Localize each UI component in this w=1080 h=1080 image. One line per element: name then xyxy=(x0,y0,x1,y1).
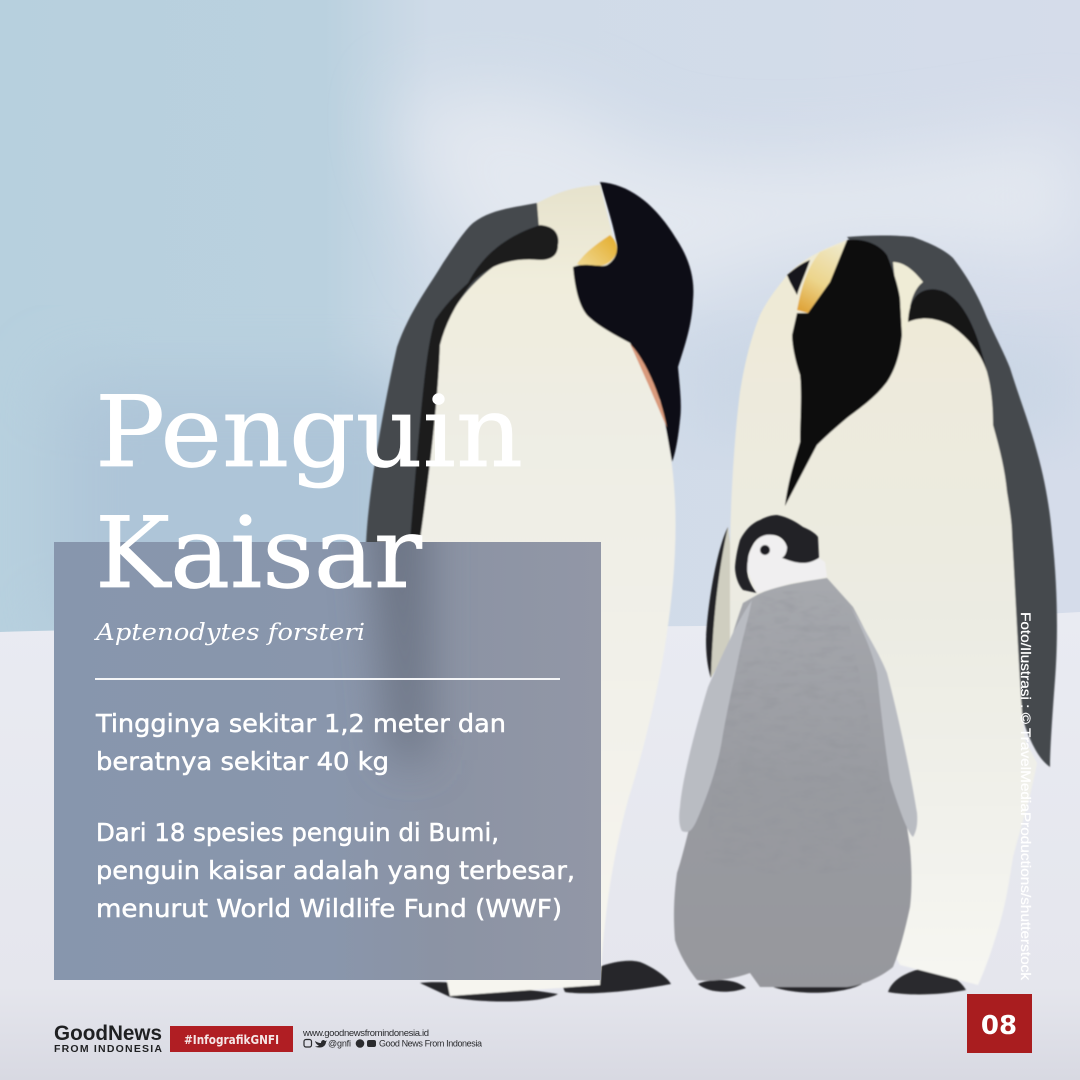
penguin chick xyxy=(674,515,917,993)
hashtag badge xyxy=(170,1026,293,1052)
frosted text panel xyxy=(54,500,601,980)
chick fur texture xyxy=(705,591,885,875)
white belly and cream neck xyxy=(418,185,676,996)
chick left flipper xyxy=(679,600,752,832)
fact: largest species xyxy=(96,818,575,923)
footer website and social handles: Good News From Indonesia xyxy=(379,1038,482,1048)
chick feet xyxy=(698,975,862,993)
title: Kaisar xyxy=(95,497,422,611)
scientific name: Aptenodytes forsteri xyxy=(94,620,365,646)
title: Penguin xyxy=(95,376,523,490)
white neck cheek xyxy=(893,262,923,335)
footer logo: GoodNews xyxy=(54,1021,162,1045)
title xyxy=(95,376,523,611)
page number xyxy=(967,994,1032,1053)
left adult penguin xyxy=(366,182,693,1002)
ear patch and dark belly edge xyxy=(410,225,558,540)
footer logo xyxy=(54,1021,162,1055)
chick black head xyxy=(735,515,819,593)
cream belly xyxy=(730,240,1037,985)
fact: size: Tingginya sekitar 1,2 meter dan xyxy=(95,709,506,738)
icon: youtube xyxy=(367,1040,376,1047)
icon: twitter xyxy=(315,1040,327,1048)
far flipper dark edge xyxy=(706,527,728,678)
icon: instagram xyxy=(304,1040,312,1047)
yellow cheek mark xyxy=(577,235,617,266)
small eye patch xyxy=(787,260,810,295)
page number: 08 xyxy=(981,1011,1017,1041)
feet of right penguin xyxy=(888,967,966,994)
right adult penguin xyxy=(706,236,1057,994)
photo credit: Foto/Ilustrasi : © TravelMediaProductions/shutterstock xyxy=(1018,612,1034,981)
fact: size xyxy=(95,709,506,776)
far flipper xyxy=(707,527,732,678)
feet of left penguin xyxy=(420,961,671,1002)
fact: largest species: penguin kaisar adalah yang terbesar, xyxy=(96,856,575,885)
blurred flipper shadow xyxy=(370,500,425,760)
footer website and social handles xyxy=(302,1028,482,1048)
black head xyxy=(785,240,902,506)
black head xyxy=(573,182,693,462)
fact: largest species: Dari 18 spesies penguin di Bumi, xyxy=(96,818,499,847)
chick eye xyxy=(760,545,770,555)
dark back and right flipper xyxy=(847,236,1057,767)
yellow neck streak xyxy=(797,243,848,313)
divider line xyxy=(95,678,560,680)
footer website and social handles: @gnfi xyxy=(328,1038,351,1048)
chick right flipper xyxy=(850,605,917,837)
back and flipper xyxy=(366,203,620,560)
icon: facebook xyxy=(356,1039,364,1048)
orange beak stripe xyxy=(630,344,667,428)
neck patch xyxy=(908,289,987,372)
chick white face xyxy=(747,535,827,593)
footer logo: FROM INDONESIA xyxy=(54,1043,162,1055)
fact: largest species: menurut World Wildlife Fund (WWF) xyxy=(96,894,562,923)
fact: size: beratnya sekitar 40 kg xyxy=(96,747,389,776)
hashtag badge: #InfografikGNFI xyxy=(184,1033,279,1047)
chick body xyxy=(674,578,912,987)
footer website and social handles: www.goodnewsfromindonesia.id xyxy=(302,1028,429,1039)
